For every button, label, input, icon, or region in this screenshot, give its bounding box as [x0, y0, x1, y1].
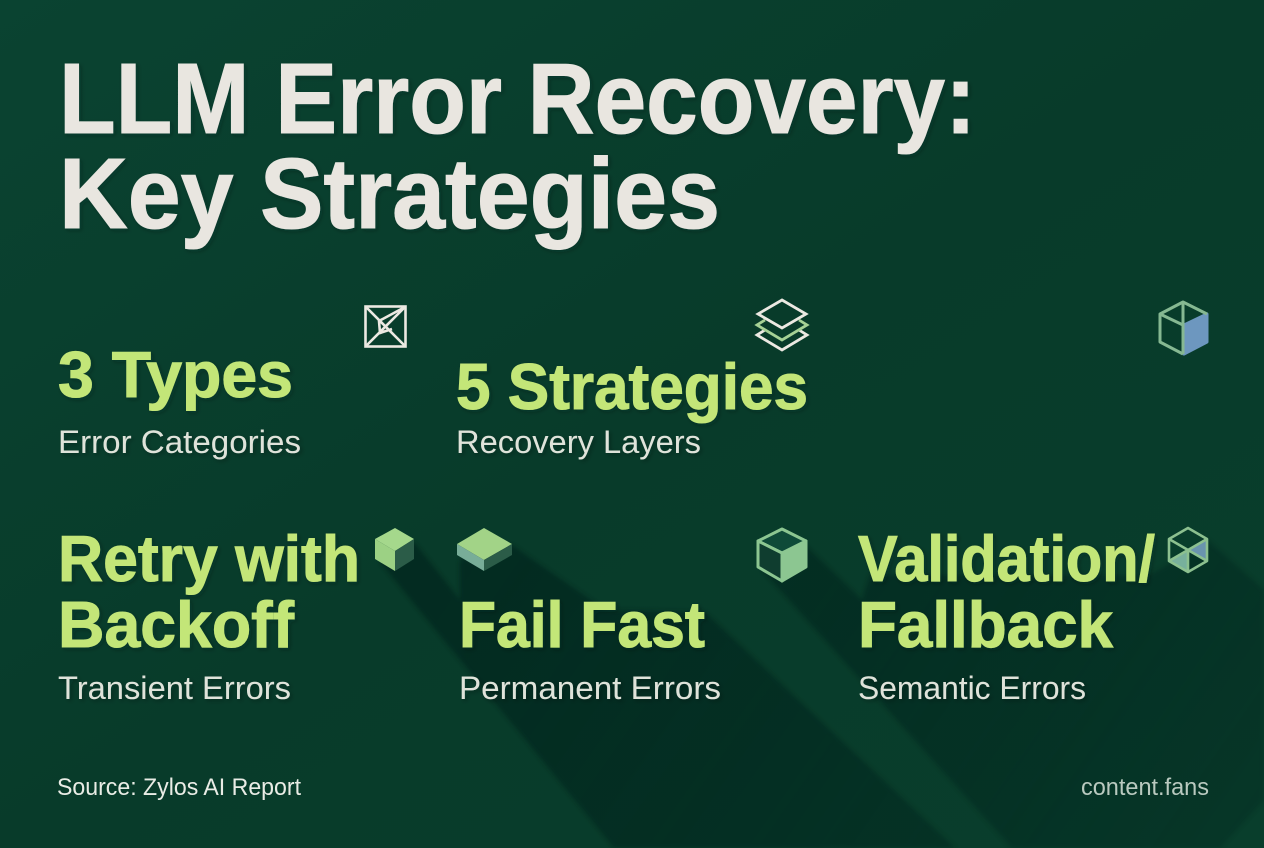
title	[59, 43, 976, 250]
card: Retry with Backoff: Transient Errors	[58, 670, 291, 706]
stat: 5 Strategies	[456, 350, 808, 460]
card: Validation/ Fallback	[858, 522, 1155, 706]
stat: 3 Types: 3 Types	[58, 338, 293, 411]
card: Fail Fast: Permanent Errors	[459, 670, 721, 706]
icon: wireframe cube with blue face	[1160, 302, 1207, 354]
stat: 3 Types: Error Categories	[58, 424, 301, 460]
card: Validation/ Fallback: Semantic Errors	[858, 670, 1086, 706]
card: Validation/ Fallback: Fallback	[858, 588, 1114, 661]
icon: outlined cube with green face	[758, 529, 806, 581]
icon: stacked layers	[757, 300, 807, 350]
stat: 5 Strategies: 5 Strategies	[456, 350, 808, 423]
footer: source: Source: Zylos AI Report	[57, 774, 301, 801]
card: Retry with Backoff	[58, 522, 360, 706]
card: Fail Fast	[459, 588, 721, 706]
stat: 3 Types	[58, 338, 301, 460]
title: LLM Error Recovery:	[59, 43, 976, 155]
card: Retry with Backoff: Retry with	[58, 522, 360, 595]
card: Validation/ Fallback: Validation/	[858, 522, 1155, 595]
title: Key Strategies	[59, 138, 720, 250]
footer: brand: content.fans	[1081, 774, 1209, 801]
icon: flat slab	[457, 528, 512, 571]
stat: 5 Strategies: Recovery Layers	[456, 424, 701, 460]
card: Retry with Backoff: Backoff	[58, 588, 294, 661]
icon: crossed square	[366, 306, 406, 346]
icon: cube with blue and teal faces	[1169, 528, 1207, 572]
card: Fail Fast: Fail Fast	[459, 588, 705, 661]
icon: solid cube	[375, 528, 414, 571]
long diagonal shadows	[380, 540, 1264, 848]
